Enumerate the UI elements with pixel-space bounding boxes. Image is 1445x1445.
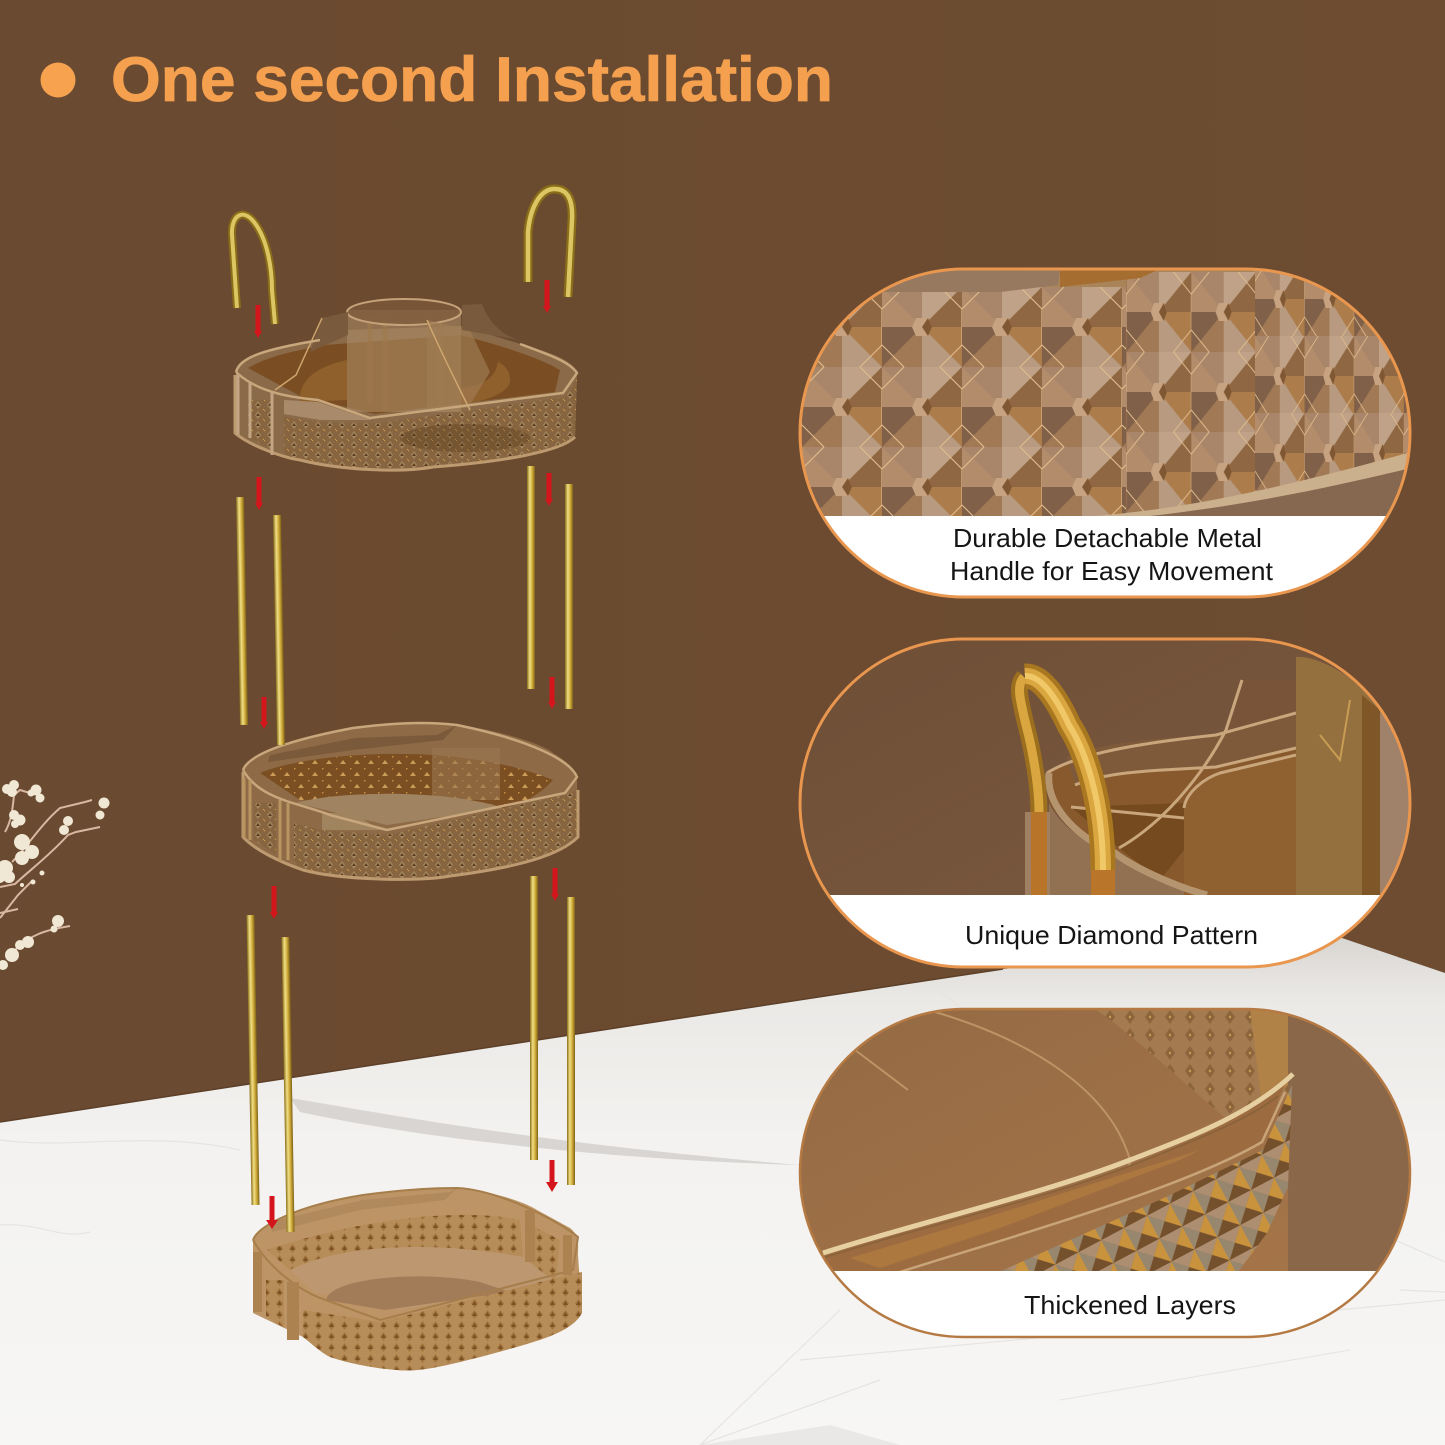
- bottom tray: [253, 1188, 582, 1370]
- top tray with brush cylinder: [235, 299, 577, 470]
- panel 1 border: [800, 269, 1410, 597]
- gold rods: [236, 466, 575, 1232]
- gold handle left: [232, 215, 275, 324]
- panel 3 border: [800, 1009, 1410, 1337]
- inner arc lines: [855, 1012, 1130, 1178]
- white caption band 1: [824, 516, 1386, 596]
- exploded assembly diagram: [232, 189, 582, 1370]
- panel: handle close-up: [800, 639, 1410, 970]
- caption 1: [950, 523, 1274, 586]
- brush cylinder: [347, 310, 461, 412]
- gold handle: [1020, 676, 1103, 870]
- band below rim: [1128, 1073, 1290, 1188]
- inner amber walls: [1184, 892, 1194, 895]
- heading: [40, 45, 833, 115]
- heading text: One second Installation: [111, 45, 833, 115]
- caption 2: Unique Diamond Pattern: [965, 920, 1258, 950]
- caption 1: Durable Detachable Metal: [953, 523, 1262, 553]
- panel: rim thickness close-up: [800, 1009, 1413, 1341]
- caption 3: Thickened Layers: [1024, 1290, 1236, 1320]
- white caption band 3: [834, 1271, 1376, 1336]
- heading bullet: [40, 62, 76, 98]
- panel: diamond pattern close-up: [800, 259, 1411, 598]
- cylinder: [1296, 657, 1382, 895]
- panel 2 border: [800, 639, 1410, 967]
- rim highlight: [823, 1074, 1293, 1253]
- blossom branch: [0, 780, 110, 970]
- gold handle right: [528, 189, 572, 297]
- diamond band: [303, 1272, 582, 1370]
- tray body: [1048, 750, 1296, 884]
- upper tray wall: [1098, 1010, 1288, 1117]
- diamonds below rim: [999, 1085, 1292, 1272]
- diamond band: [284, 378, 577, 470]
- red arrows: [254, 280, 559, 1229]
- sleeves: [1025, 812, 1050, 895]
- rim lines: [1047, 680, 1296, 848]
- middle tray: [243, 723, 578, 880]
- white caption band 2: [830, 895, 1380, 966]
- upper wall: [1067, 713, 1296, 785]
- marble table top: [0, 938, 1445, 1445]
- diamond band: [294, 790, 578, 880]
- caption 1: Handle for Easy Movement: [950, 556, 1274, 586]
